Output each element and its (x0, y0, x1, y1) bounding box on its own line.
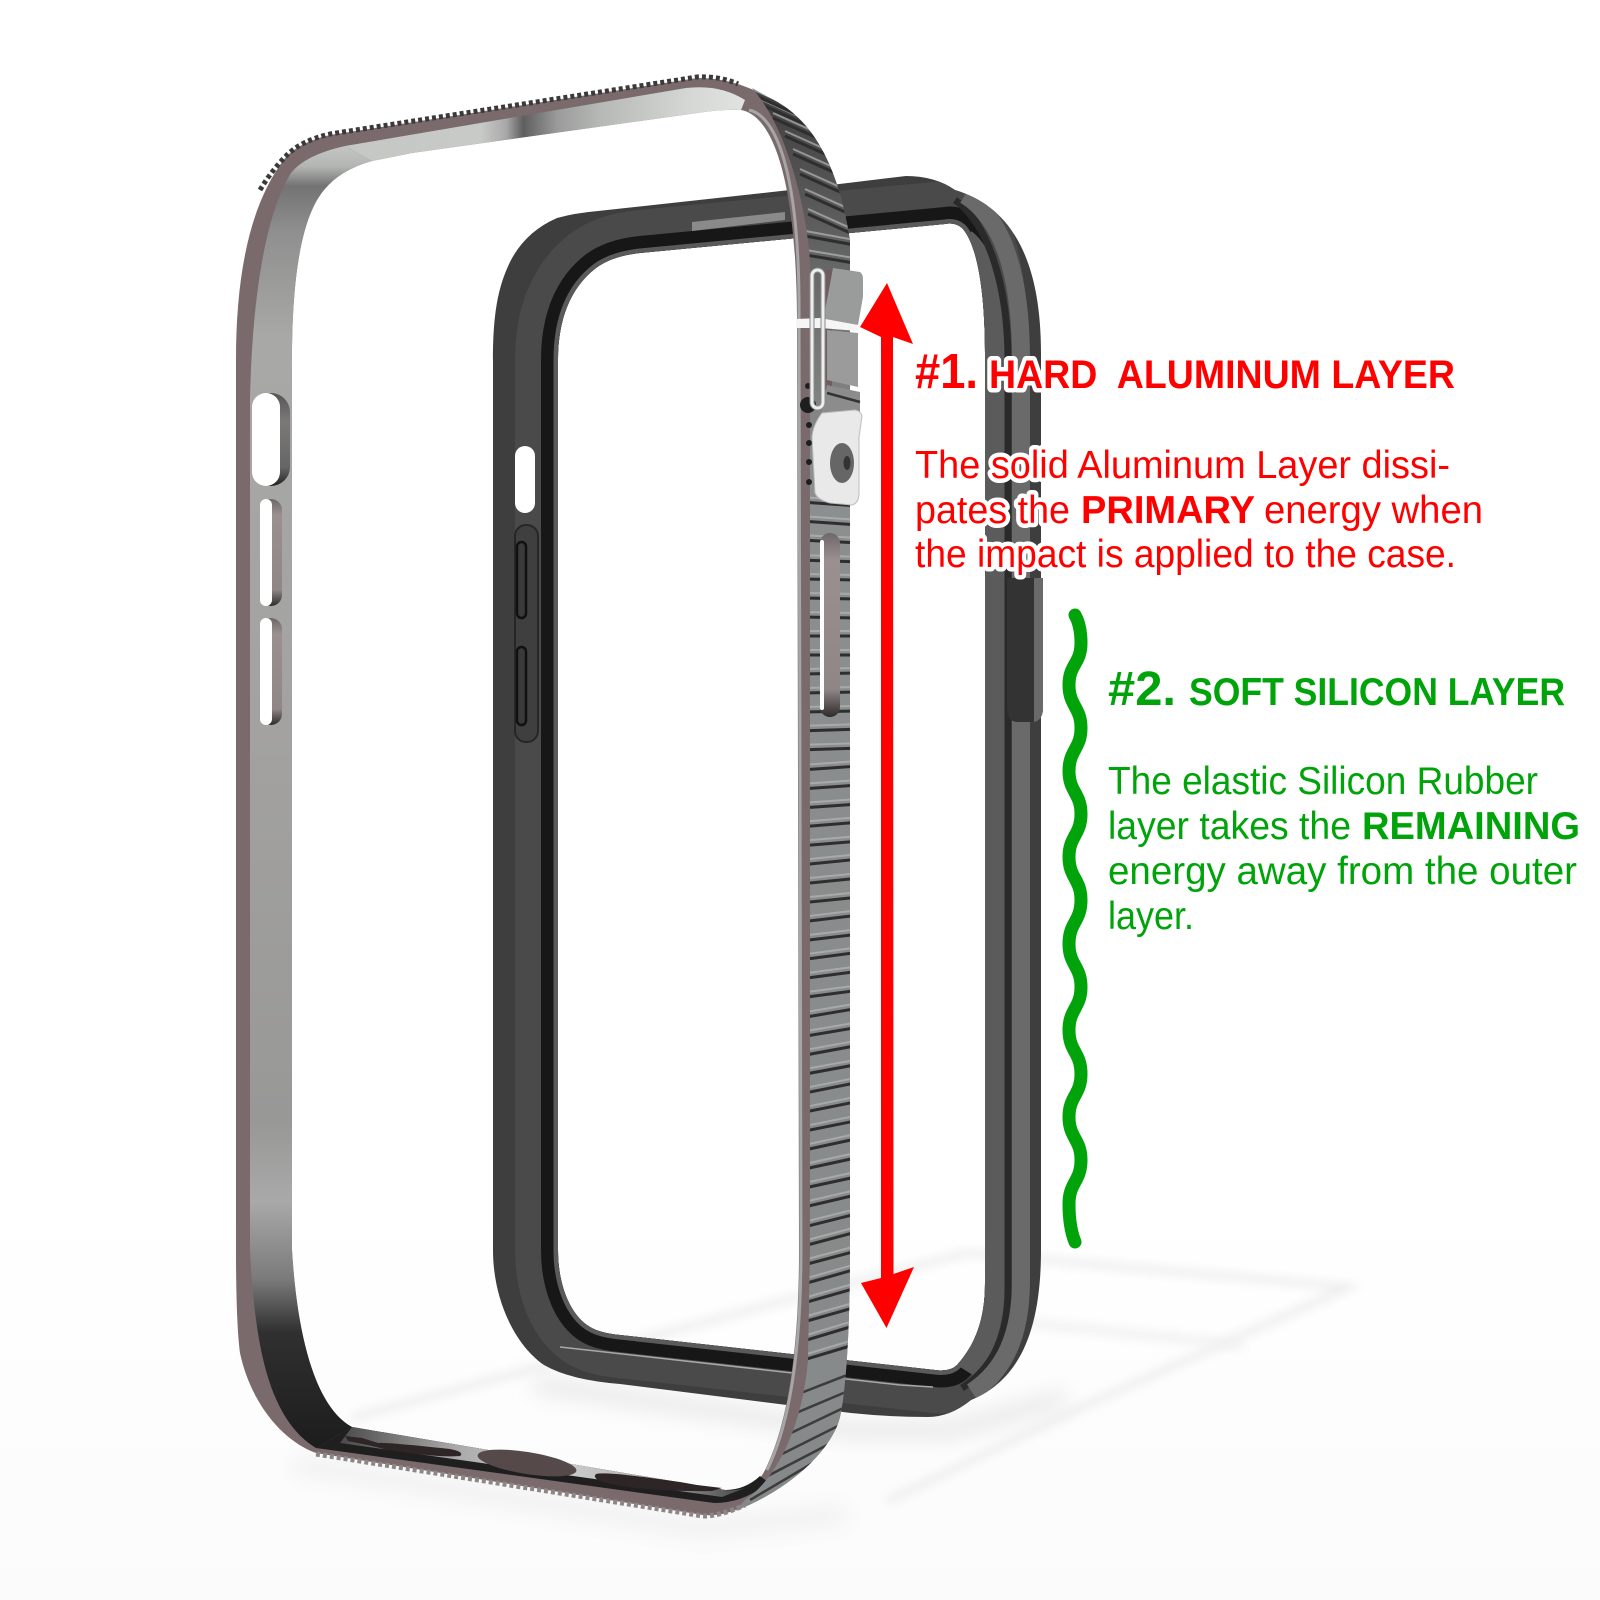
charging port (476, 1444, 578, 1482)
aluminum ribbed side (735, 88, 850, 1511)
clip lower tab (827, 330, 858, 387)
text block: silicon layer description: REMAINING (1362, 805, 1580, 848)
speaker slot left (345, 1436, 461, 1456)
metal clip attachment (796, 268, 863, 505)
aluminum left polished band (250, 146, 372, 1448)
top edge teeth (260, 77, 738, 190)
heading: #2 soft silicon layer: SOFT SILICON LAYER (1189, 671, 1565, 714)
aluminum bottom band (316, 1427, 768, 1503)
outer hard aluminum frame (236, 77, 868, 1530)
floor shadows (300, 1253, 1349, 1528)
text block: aluminum layer description: energy when (1264, 489, 1483, 532)
white gap across side (796, 318, 858, 331)
arrow: red double-headed impact arrow (860, 283, 914, 1328)
inner soft silicone frame (493, 176, 1043, 1417)
clip wire loop (812, 270, 823, 408)
power button slot on ribbed side (820, 533, 840, 717)
clip bolt (830, 443, 854, 483)
text block: silicon layer description: The elastic Silicon Rubber (1108, 760, 1538, 803)
heading: #2 soft silicon layer (1108, 663, 1565, 716)
text block: silicon layer description: energy away from the outer (1108, 850, 1577, 893)
silicone power button (1007, 578, 1043, 722)
heading: #1 hard aluminum layer: #1. (915, 345, 978, 399)
bottom edge teeth (316, 1454, 745, 1516)
silicone volume buttons (515, 525, 538, 742)
text block: silicon layer description: layer takes the (1108, 805, 1351, 848)
silicone frame inner bands (558, 195, 1021, 1392)
text block: silicon layer description: layer. (1108, 895, 1194, 938)
wavy green line (1069, 615, 1081, 1242)
text block: aluminum layer description: PRIMARY (1081, 489, 1255, 532)
infographic: two layer phone case (236, 74, 1578, 1539)
silicone top button (692, 212, 785, 231)
text block: silicon layer description (1108, 760, 1580, 938)
heading: #1 hard aluminum layer (915, 345, 1455, 399)
left large camera hole (252, 393, 290, 486)
clip silver plate (812, 410, 862, 505)
aluminum purple edge ring (236, 78, 850, 1515)
text block: aluminum layer description: the impact is applied to the case. (915, 533, 1456, 576)
silicone frame body (493, 176, 1041, 1417)
clip backing (823, 270, 832, 390)
clip dark pivot and dots (800, 383, 816, 485)
heading: #2 soft silicon layer: #2. (1108, 663, 1176, 716)
text block: aluminum layer description: The solid Aluminum Layer dissi- (915, 444, 1450, 487)
text block: aluminum layer description: pates the (915, 489, 1070, 532)
left volume slot lower (260, 618, 282, 725)
aluminum top polished band (345, 87, 745, 161)
heading: #1 hard aluminum layer: HARD ALUMINUM LAYER (989, 353, 1455, 397)
clip upper tab (823, 268, 863, 325)
speaker slot right (595, 1473, 722, 1491)
silicone side camera hole (515, 446, 535, 513)
left volume slot upper (260, 499, 282, 606)
text block: aluminum layer description (915, 444, 1483, 576)
clip folded strip (822, 385, 860, 412)
side edge highlight (749, 110, 801, 1470)
